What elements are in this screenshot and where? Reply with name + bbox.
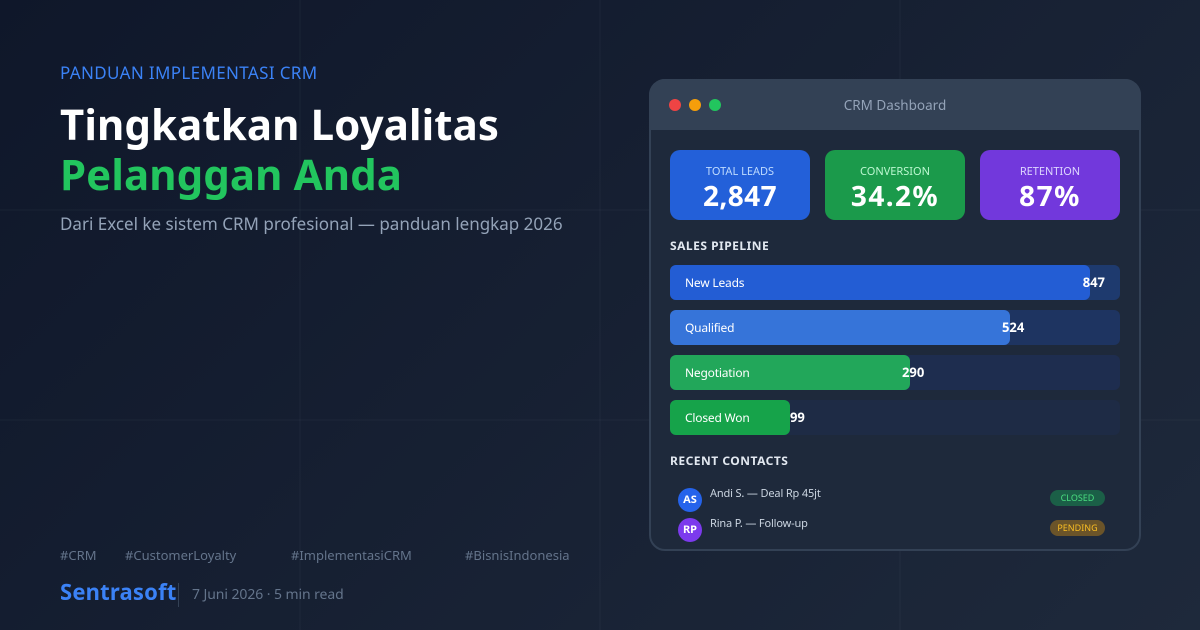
status badge pending: PENDING — [1057, 521, 1098, 534]
avatar AS — [678, 488, 702, 512]
bar: qualified: 524 — [1002, 318, 1024, 336]
bar: qualified: Qualified — [685, 319, 734, 336]
bar: new leads — [670, 265, 1120, 300]
stat: total leads: TOTAL LEADS — [706, 164, 774, 179]
hashtags: #ImplementasiCRM — [291, 546, 412, 564]
status badge closed — [1050, 490, 1105, 506]
contact text: Rina P. — Follow-up — [710, 516, 808, 531]
status badge closed: CLOSED — [1061, 491, 1094, 504]
bar: negotiation: Negotiation — [685, 364, 750, 381]
stat: conversion: CONVERSION — [860, 164, 930, 179]
eyebrow label: PANDUAN IMPLEMENTASI CRM — [60, 61, 317, 84]
status badge pending — [1050, 520, 1105, 536]
brand logo: Sentrasoft — [60, 577, 177, 607]
bar: negotiation — [670, 355, 1120, 390]
bar: negotiation: 290 — [902, 363, 924, 381]
bar: closed won — [670, 400, 1120, 435]
bar: closed won: 99 — [790, 408, 805, 426]
bar chart: sales pipeline — [670, 265, 1120, 435]
window title: CRM Dashboard — [844, 96, 946, 114]
contact: Rina P. — [678, 516, 1105, 542]
divider and date: 7 Juni 2026 · 5 min read — [192, 585, 344, 604]
title — [60, 96, 499, 203]
avatar RP — [678, 518, 702, 542]
subtitle: Dari Excel ke sistem CRM profesional — panduan lengkap 2026 — [60, 212, 563, 235]
hashtags: #CRM — [60, 546, 96, 564]
stat: retention: RETENTION — [1020, 164, 1080, 179]
panel: CRM dashboard — [649, 79, 1141, 551]
bar: new leads: 847 — [1083, 273, 1105, 291]
contact: Andi S. — [678, 486, 1105, 512]
stat: retention: 87% — [1019, 177, 1081, 215]
stat: conversion: 34.2% — [851, 177, 939, 215]
bar: qualified — [670, 310, 1120, 345]
contact text: Andi S. — Deal Rp 45jt — [710, 486, 821, 501]
hashtags: #CustomerLoyalty — [125, 546, 236, 564]
stat: conversion — [825, 150, 965, 220]
window title bar — [649, 79, 1141, 130]
bar: closed won: Closed Won — [685, 409, 750, 426]
avatar RP: RP — [683, 522, 697, 537]
stat: total leads: 2,847 — [703, 177, 777, 215]
stat: retention — [980, 150, 1120, 220]
window buttons — [669, 99, 721, 111]
hashtags: #BisnisIndonesia — [465, 546, 570, 564]
bar: new leads: New Leads — [685, 274, 744, 291]
avatar AS: AS — [683, 492, 697, 507]
stat: total leads — [670, 150, 810, 220]
hashtags — [60, 546, 570, 564]
heading: recent contacts: RECENT CONTACTS — [670, 452, 788, 469]
heading: sales pipeline: SALES PIPELINE — [670, 237, 769, 254]
title: Tingkatkan Loyalitas — [60, 96, 499, 153]
title: Pelanggan Anda — [60, 146, 402, 203]
